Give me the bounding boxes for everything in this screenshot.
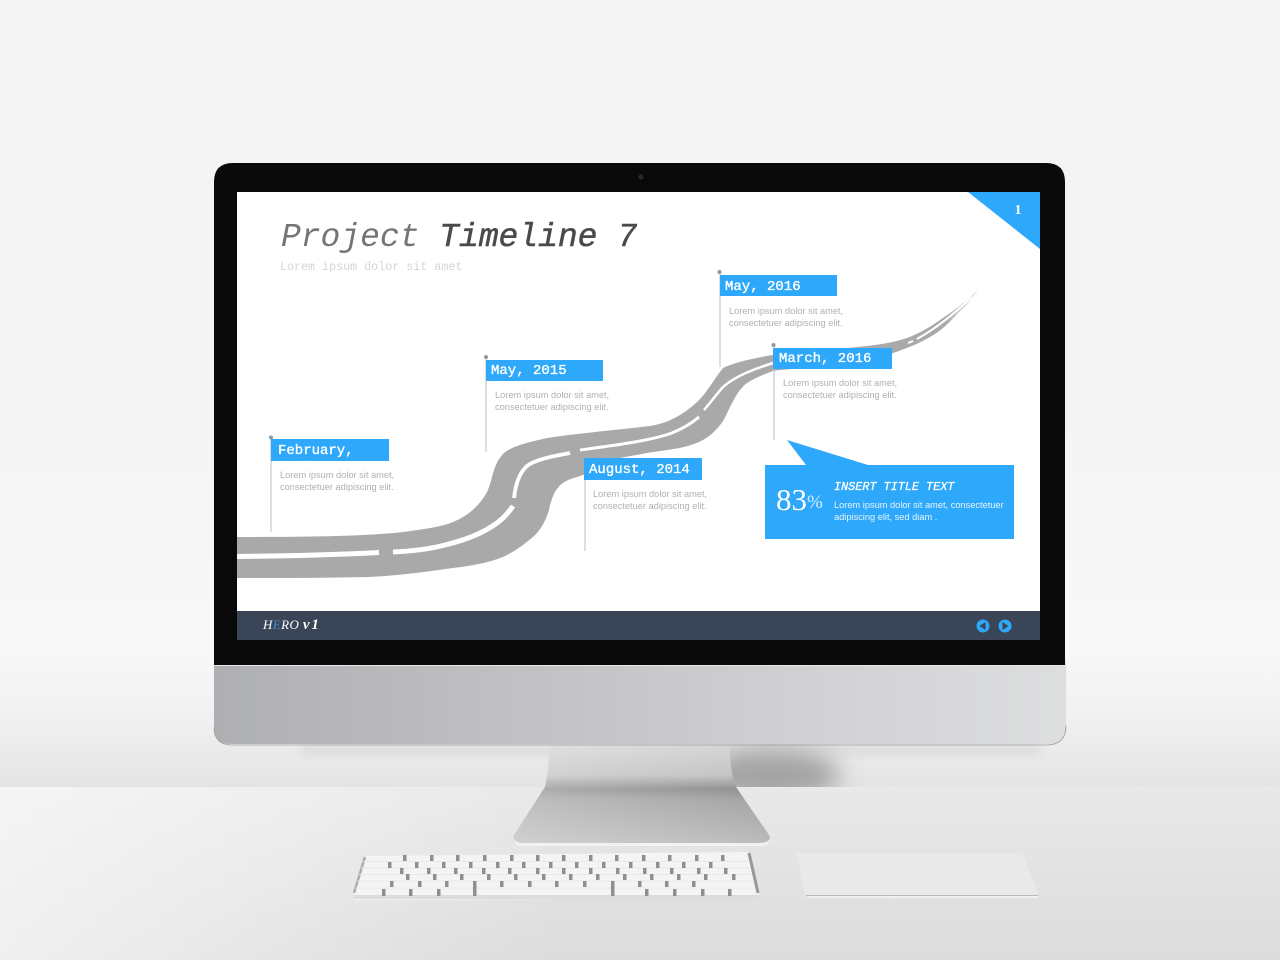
footer logo: HERO v1 xyxy=(262,617,321,633)
flag xyxy=(773,348,892,369)
monitor chin xyxy=(214,660,1066,744)
road tip fade xyxy=(949,287,980,322)
key gaps xyxy=(382,855,736,896)
flag pole xyxy=(485,356,487,452)
description: Lorem ipsum dolor sit amet, xyxy=(783,378,897,388)
next arrow xyxy=(998,620,1012,632)
flag xyxy=(584,458,702,480)
milestone: May 2015: May, 2015 xyxy=(491,363,567,379)
description: consectetuer adipiscing elit. xyxy=(280,482,394,492)
desk surface xyxy=(0,787,1280,960)
keyboard body xyxy=(353,852,759,900)
description: consectetuer adipiscing elit. xyxy=(593,501,707,511)
description: consectetuer adipiscing elit. xyxy=(729,318,843,328)
previous arrow xyxy=(976,620,990,632)
keyboard xyxy=(353,852,759,900)
flag pole xyxy=(719,272,721,367)
callout text: Lorem ipsum dolor sit amet, consectetuer xyxy=(834,500,1004,510)
screen xyxy=(237,192,1040,640)
key row lines xyxy=(355,862,755,888)
webcam xyxy=(638,174,644,180)
monitor bezel xyxy=(214,163,1065,665)
page corner badge: 1 xyxy=(1014,203,1022,218)
flag pole xyxy=(270,438,272,532)
description: Lorem ipsum dolor sit amet, xyxy=(593,489,707,499)
road centre dashes xyxy=(236,297,972,556)
monitor xyxy=(214,163,1066,745)
trackpad xyxy=(797,853,1038,898)
description: Lorem ipsum dolor sit amet, xyxy=(729,306,843,316)
road xyxy=(236,282,983,578)
milestone: May 2016: May, 2016 xyxy=(725,279,801,295)
milestone: August 2014 xyxy=(584,458,707,551)
callout stat: 83 xyxy=(776,482,807,517)
description: Lorem ipsum dolor sit amet, xyxy=(280,470,394,480)
slide title: Project Timeline 7 xyxy=(281,219,637,256)
flag xyxy=(486,360,603,381)
milestone: February 2014: 2014 xyxy=(278,459,312,475)
milestone: February 2014 xyxy=(269,436,394,532)
description: consectetuer adipiscing elit. xyxy=(495,402,609,412)
callout: 83 percent xyxy=(765,440,1014,539)
stand base lip xyxy=(513,837,771,846)
milestone: February 2014: February, xyxy=(278,443,354,459)
stand body xyxy=(513,744,770,845)
callout text: adipiscing elit, sed diam . xyxy=(834,512,937,522)
callout heading: INSERT TITLE TEXT xyxy=(834,480,955,494)
milestone: May 2016 xyxy=(718,270,843,367)
flag pole xyxy=(584,458,586,551)
page corner badge xyxy=(968,192,1040,249)
description: Lorem ipsum dolor sit amet, xyxy=(495,390,609,400)
description: consectetuer adipiscing elit. xyxy=(783,390,897,400)
milestone: March 2016 xyxy=(772,343,897,440)
milestone: May 2015 xyxy=(484,355,609,452)
callout stat: % xyxy=(807,492,823,513)
monitor stand xyxy=(513,744,771,846)
footer bar xyxy=(237,611,1040,640)
flag xyxy=(271,439,389,461)
milestone: March 2016: March, 2016 xyxy=(779,351,871,367)
wall shadow behind stand xyxy=(302,744,1038,787)
milestone: August 2014: August, 2014 xyxy=(589,462,690,478)
flag pole xyxy=(773,346,775,440)
slide subtitle: Lorem ipsum dolor sit amet xyxy=(280,260,462,274)
flag xyxy=(720,275,837,296)
